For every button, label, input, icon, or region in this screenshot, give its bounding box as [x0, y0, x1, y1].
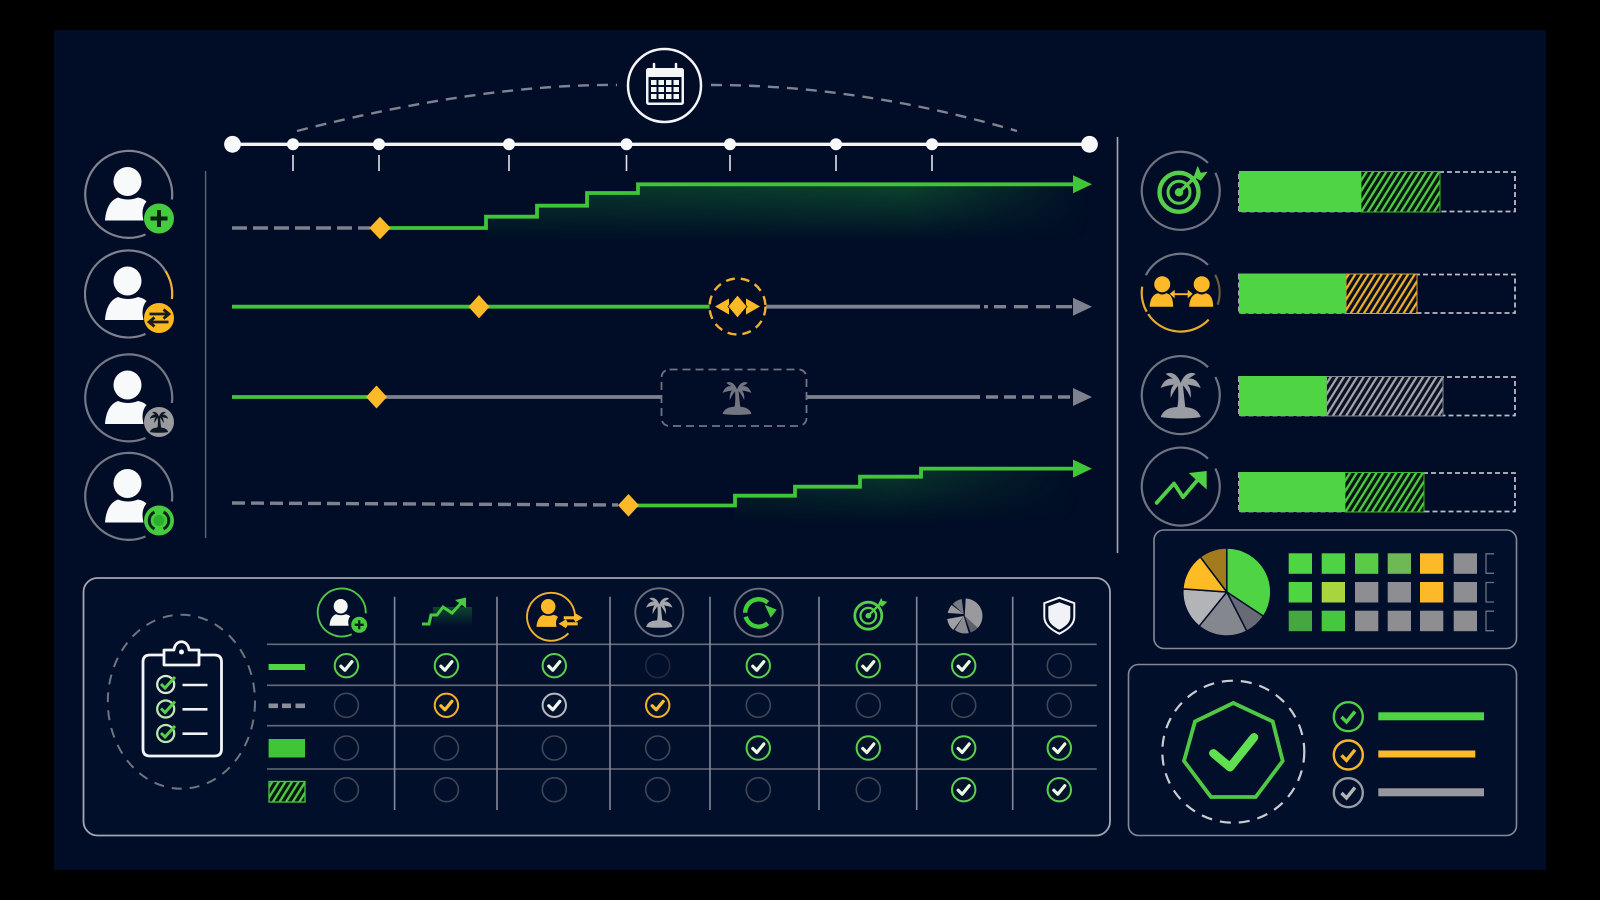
- check marks row 3: [334, 736, 1071, 760]
- status item yellow: [1334, 740, 1475, 770]
- milestone diamond: [468, 295, 490, 318]
- progress bar: [1239, 376, 1515, 416]
- glow under step line: [488, 186, 1060, 234]
- dashed lead-in: [232, 503, 618, 505]
- chart row 4: rotation: [232, 460, 1092, 516]
- panel: distribution: [1154, 530, 1516, 648]
- icon: checklist clipboard: [108, 615, 255, 789]
- heatmap grid: [1289, 553, 1494, 631]
- divider left: [205, 171, 207, 538]
- panel: coverage matrix: [84, 578, 1110, 836]
- header icon: ramp: [422, 598, 472, 626]
- milestone diamond: [618, 494, 639, 517]
- icon: two people swap: [1142, 254, 1220, 332]
- legend: dashed line: [269, 703, 305, 708]
- panel: approval status: [1128, 664, 1516, 836]
- step line: [380, 184, 1076, 228]
- chart row 2: swap: [232, 278, 1092, 334]
- panel frame: [1154, 530, 1516, 648]
- dashed lead-in: [232, 226, 370, 230]
- dashed arc right: [711, 85, 1017, 131]
- icon: heptagon check: [1184, 703, 1283, 797]
- metric 1: target: [1142, 152, 1515, 230]
- grey line: [766, 305, 980, 309]
- header icon: vacation: [635, 588, 683, 636]
- green line: [232, 395, 376, 399]
- avatar: shift swap: [85, 250, 174, 337]
- header icon: swap: [527, 593, 580, 641]
- avatar: rotation: [85, 453, 174, 540]
- dashed ring: [1162, 681, 1304, 823]
- check marks row 4: [334, 778, 1071, 802]
- legend: solid line: [269, 664, 305, 670]
- progress bar: [1239, 171, 1515, 212]
- panel frame: [84, 578, 1110, 836]
- header icon: shield: [1044, 598, 1074, 634]
- metric 2: swap: [1142, 254, 1515, 332]
- header icon: target: [855, 598, 887, 629]
- header icon: mini pie: [947, 598, 982, 633]
- dashed tail: [986, 395, 1072, 399]
- arrow: [1073, 175, 1092, 193]
- timeline axis: [224, 136, 1098, 171]
- metric 4: growth: [1142, 448, 1515, 526]
- dash-dot tail: [984, 305, 1072, 308]
- pie chart: [1183, 548, 1271, 636]
- grey line after gap: [807, 395, 980, 399]
- icon: target: [1142, 152, 1220, 230]
- icon: palm tree: [1142, 356, 1220, 434]
- arrow: [1073, 460, 1092, 478]
- avatar: vacation: [85, 354, 174, 441]
- metric 3: vacation: [1142, 356, 1515, 434]
- panel frame: [1128, 664, 1516, 836]
- status item grey: [1334, 778, 1484, 807]
- progress bar: [1239, 274, 1515, 314]
- milestone diamond: [366, 386, 387, 408]
- icon: trend arrow: [1142, 448, 1220, 526]
- table grid: [267, 597, 1097, 810]
- glow under step line: [737, 470, 1038, 514]
- chart row 3: vacation: [232, 370, 1092, 426]
- step line: [628, 469, 1076, 506]
- icon: calendar: [628, 49, 701, 122]
- status item green: [1334, 702, 1484, 731]
- header icon: rotation: [735, 589, 783, 637]
- arrow: [1073, 388, 1092, 406]
- divider right: [1116, 137, 1118, 553]
- green line: [232, 305, 710, 309]
- avatar: new hire: [85, 151, 174, 238]
- swap marker: [710, 278, 766, 334]
- timeline with calendar: [224, 49, 1098, 171]
- check marks row 2: [334, 693, 1071, 717]
- progress bar: [1239, 472, 1515, 512]
- milestone diamond: [369, 217, 391, 239]
- grey line: [376, 395, 662, 399]
- legend: hatched block: [269, 782, 305, 802]
- legend: solid block: [269, 739, 305, 758]
- chart row 1: ramp up: [232, 175, 1092, 243]
- dashed arc left: [297, 85, 617, 131]
- vacation gap: [662, 370, 806, 426]
- header icon: new hire: [318, 588, 367, 636]
- arrow: [1073, 298, 1092, 316]
- check marks row 1: [335, 654, 1071, 678]
